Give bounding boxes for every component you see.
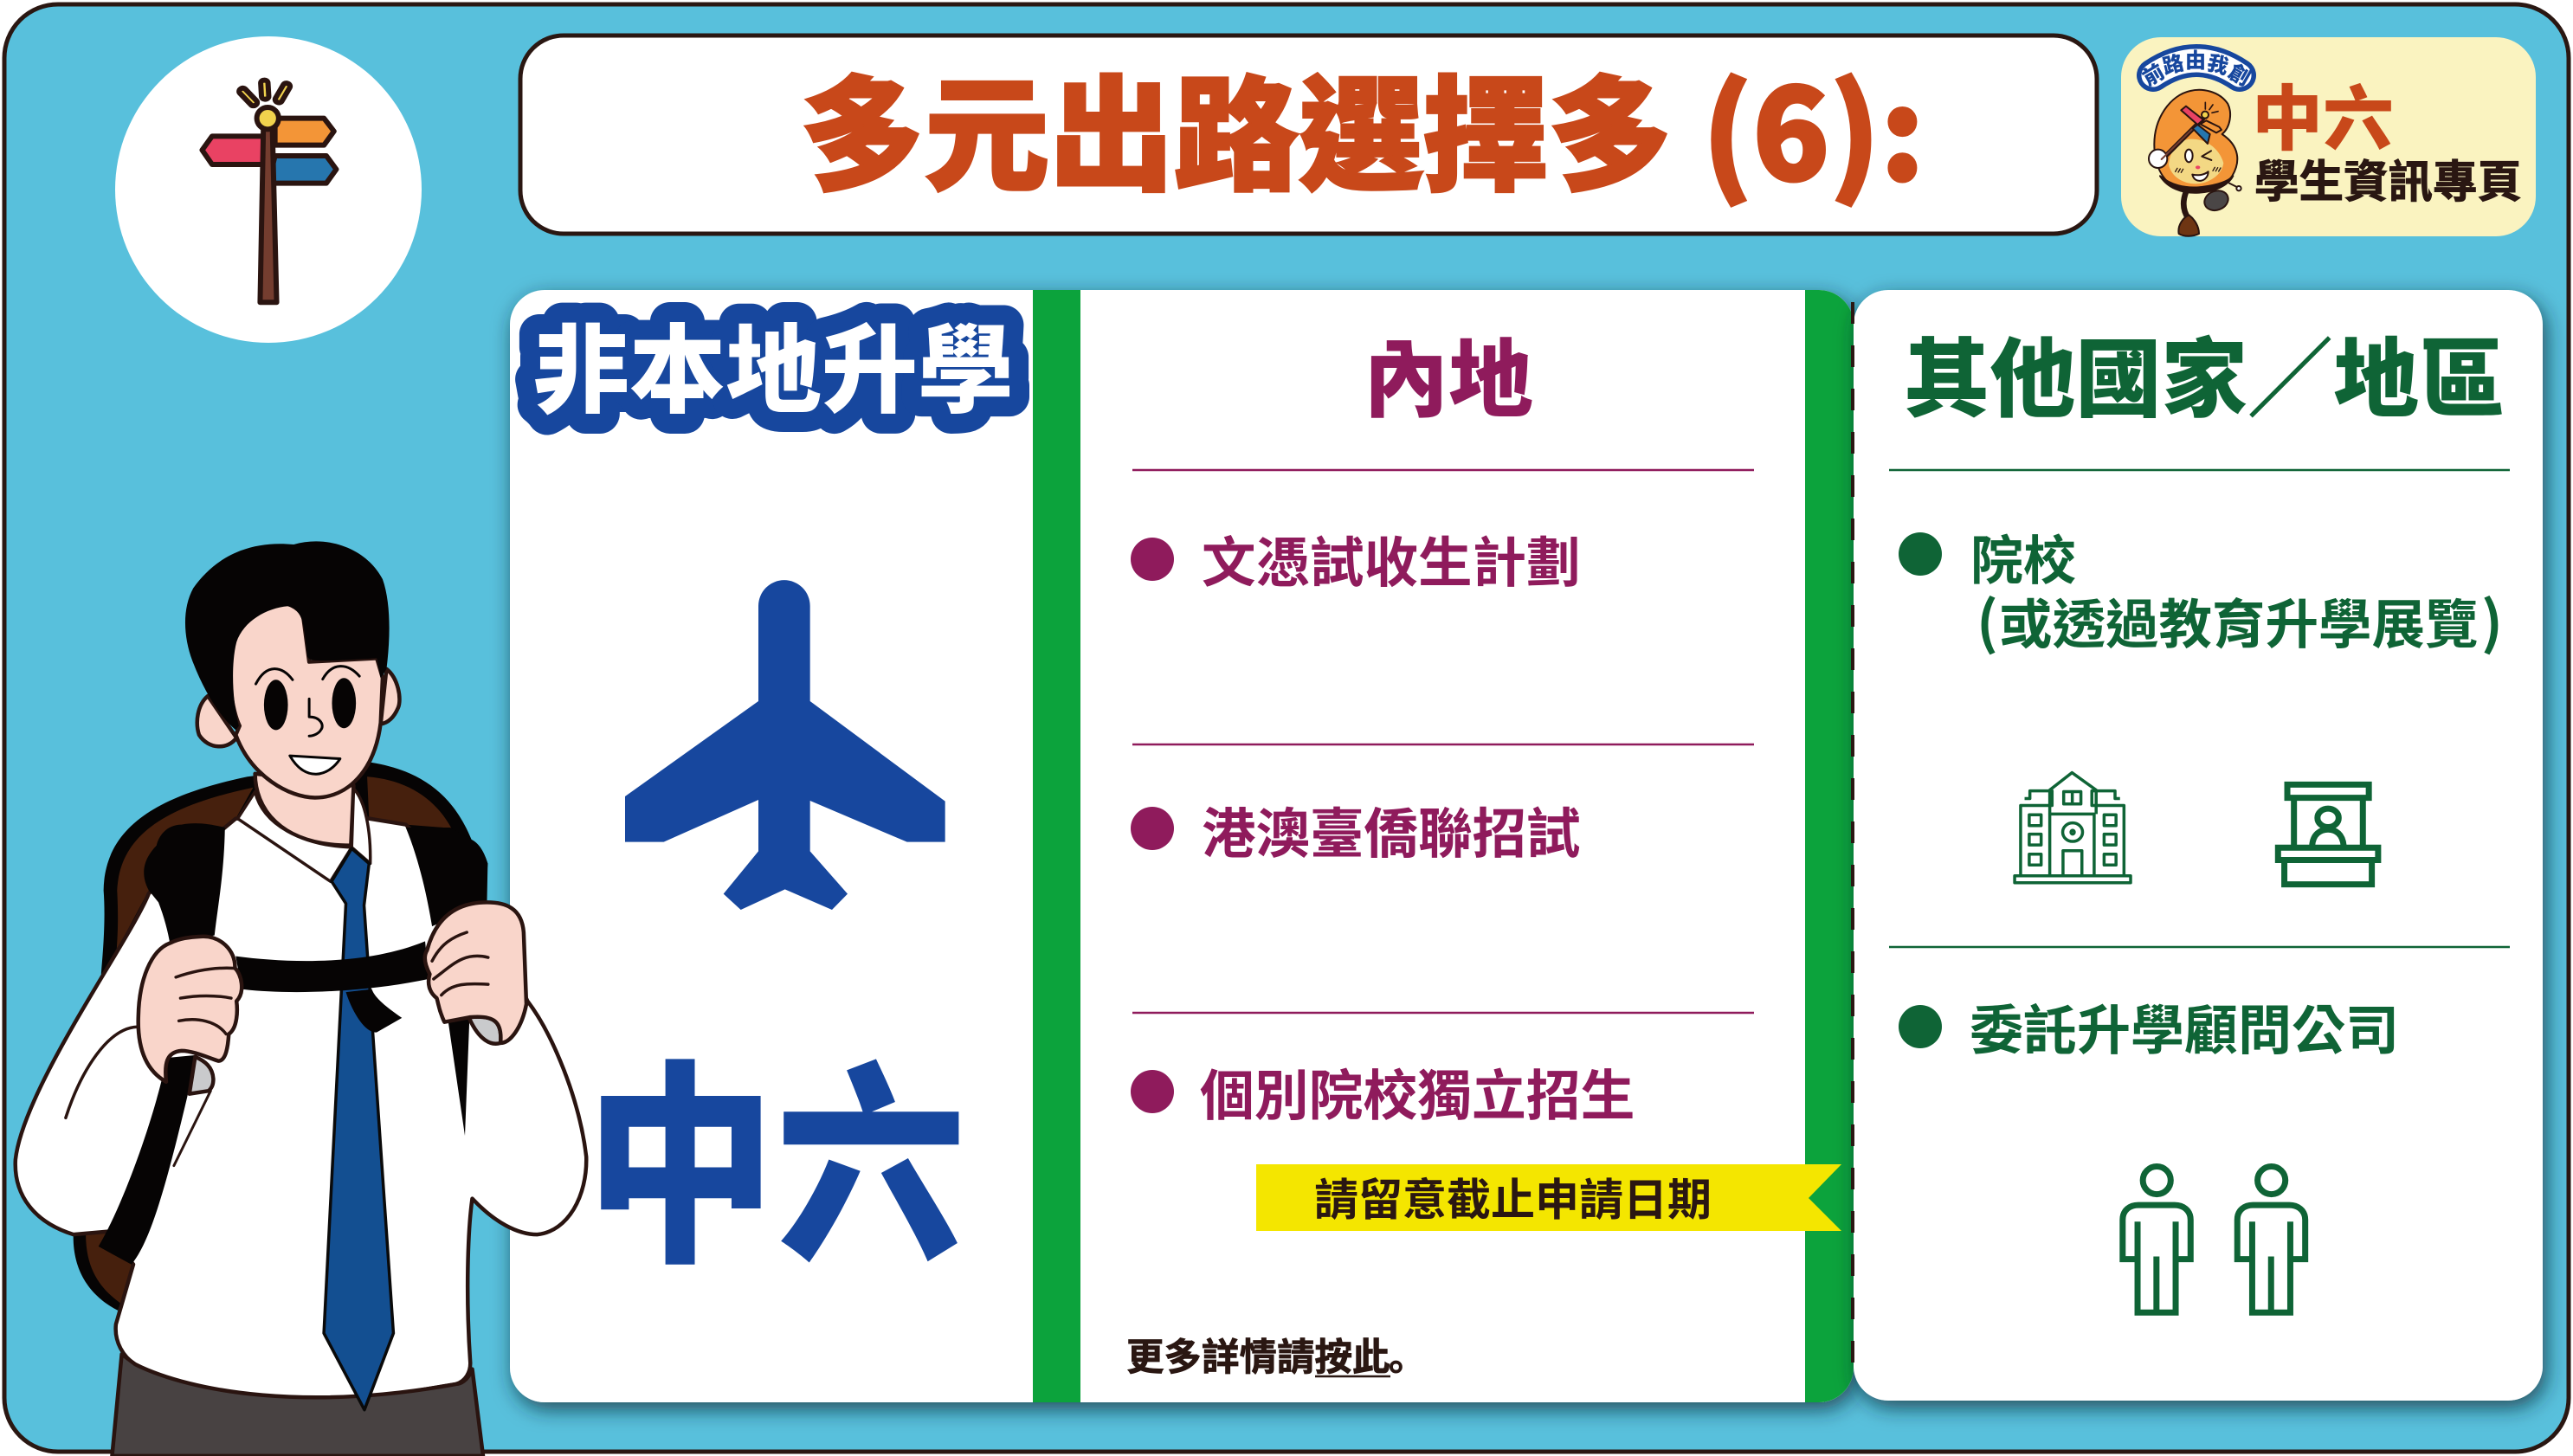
illustration: student with backpack xyxy=(16,541,586,1456)
mascot xyxy=(2149,90,2241,236)
ribbon callout xyxy=(1256,1164,1841,1231)
heading: other countries: 其他國家／地區 xyxy=(1904,310,2505,435)
trousers xyxy=(112,1354,483,1456)
icon: two people xyxy=(2123,1166,2305,1312)
title: 多元出路選擇多 xyxy=(800,36,1673,216)
more details note: 更多詳情請按此 xyxy=(1126,1327,1390,1382)
straps xyxy=(99,823,487,1265)
icon: school building xyxy=(2015,773,2131,883)
logo arc slogan xyxy=(2136,43,2257,92)
large label: 中六 xyxy=(585,993,966,1306)
right hand xyxy=(425,902,526,1044)
hair xyxy=(185,541,390,730)
more details note: 。 xyxy=(1389,1327,1427,1382)
panel: main ticket left xyxy=(510,290,1854,1402)
section: mainland xyxy=(1126,312,1841,1382)
logo badge xyxy=(2121,37,2536,236)
ears xyxy=(197,669,399,746)
logo arc slogan: 由 xyxy=(2185,43,2206,74)
title: (6): xyxy=(1702,35,1925,217)
item: institutions xyxy=(1899,518,2503,660)
section: other countries xyxy=(1889,310,2510,1312)
logo arc slogan: 創 xyxy=(2224,55,2257,92)
eyes and expression xyxy=(256,667,359,774)
backpack xyxy=(74,762,487,1311)
panel: other countries xyxy=(1854,290,2543,1401)
item: institutions: 或透過教育升學展覽 xyxy=(1999,582,2479,659)
item: independent admission: 個別院校獨立招生 xyxy=(1200,1053,1635,1131)
left stripe xyxy=(1033,290,1080,1402)
logo arc slogan: 前 xyxy=(2136,55,2169,92)
collar xyxy=(238,789,371,881)
item: institutions: ( xyxy=(1977,577,1998,660)
item: institutions: ) xyxy=(2481,577,2503,660)
shirt and arms xyxy=(16,819,586,1401)
logo arc slogan: 路 xyxy=(2159,46,2187,80)
logo arc slogan: 我 xyxy=(2204,46,2232,80)
right stripe xyxy=(1805,290,1854,1402)
icon: airplane xyxy=(625,580,945,910)
perforated dashed line xyxy=(1851,302,1854,1376)
necktie xyxy=(324,848,393,1410)
logo text: 中六 xyxy=(2252,61,2394,164)
left hand xyxy=(139,937,242,1166)
icon: exhibition booth xyxy=(2278,784,2378,885)
item: joint exam: 港澳臺僑聯招試 xyxy=(1202,789,1581,868)
face xyxy=(230,602,383,797)
logo subtitle: 學生資訊專頁 xyxy=(2254,145,2522,210)
title box xyxy=(520,35,2097,234)
neck xyxy=(255,774,353,846)
heading: non-local study: 非本地升學 xyxy=(533,293,1014,432)
icon: signpost in white circle xyxy=(115,36,422,343)
ribbon callout: 請留意截止申請日期 xyxy=(1314,1164,1712,1228)
item: consultancy: 委託升學顧問公司 xyxy=(1970,987,2399,1065)
heading: mainland: 內地 xyxy=(1364,312,1533,435)
item: institutions: 院校 xyxy=(1970,518,2076,595)
sleeve crease xyxy=(66,1027,137,1118)
item: diploma scheme: 文憑試收生計劃 xyxy=(1202,519,1581,597)
